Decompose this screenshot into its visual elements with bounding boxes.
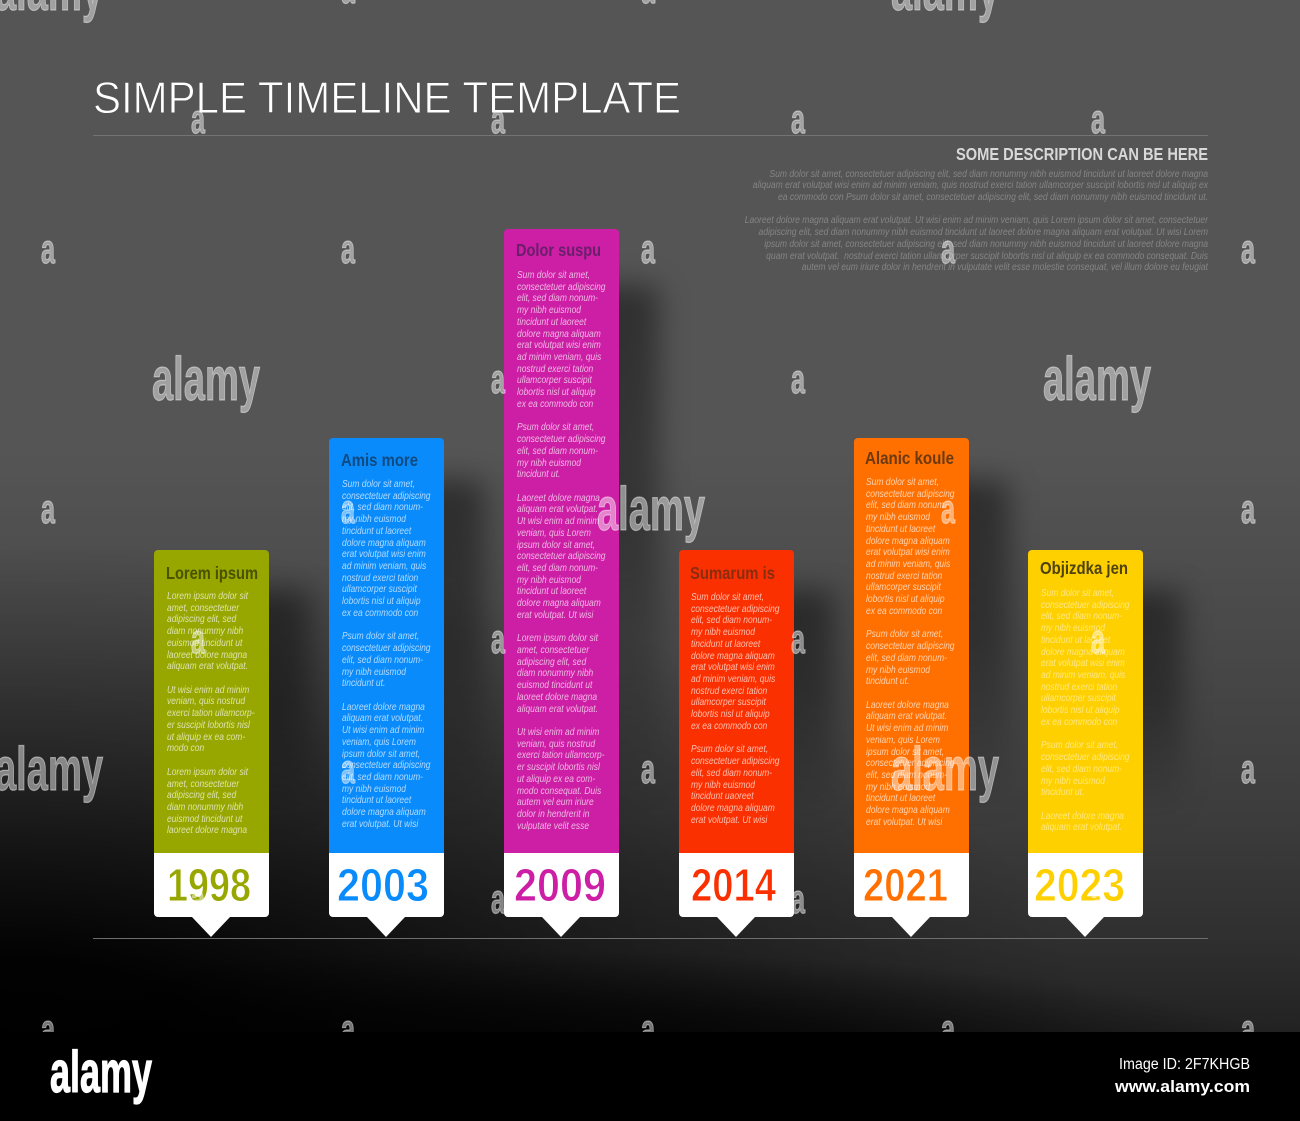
- panel: 2021: erat volutpat wisi enim: [866, 547, 950, 558]
- panel: 2021: consectetuer adipiscing: [866, 758, 955, 769]
- panel: 2003: ipsum dolor sit amet,: [342, 749, 420, 760]
- panel: 1998: diam nonummy nibh: [167, 802, 243, 813]
- watermark overlay: a: [791, 876, 806, 922]
- panel: 2014: Sumarum is: [690, 563, 775, 583]
- panel: 2003: aliquam erat volutpat.: [342, 713, 423, 724]
- panel: 2009: consectetuer adipiscing: [517, 434, 606, 445]
- panel: 2021: ad minim veniam, quis: [866, 559, 950, 570]
- panel: 2021: elit, sed diam nonum-: [866, 653, 947, 664]
- panel: 2003: elit, sed diam nonum-: [342, 502, 423, 513]
- panel: 2009: my nibh euismod: [517, 305, 581, 316]
- panel: 2009: Sum dolor sit amet,: [517, 270, 590, 281]
- panel: 2014: consectetuer adipiscing: [691, 604, 780, 615]
- panel: 2021: erat volutpat. Ut wisi: [866, 817, 942, 828]
- watermark overlay: a: [941, 226, 956, 272]
- watermark overlay: a: [941, 486, 956, 532]
- panel: 2009: consectetuer adipiscing: [517, 551, 606, 562]
- panel: 2021: lobortis nisl ut aliquip: [866, 594, 945, 605]
- watermark overlay: a: [1091, 876, 1106, 922]
- watermark overlay: a: [1241, 486, 1256, 532]
- panel: 2014: elit, sed diam nonum-: [691, 768, 772, 779]
- panel: 1998: amet, consectetuer: [167, 778, 239, 790]
- panel: 2021: ullamcorper suscipit: [866, 582, 941, 593]
- website: www.alamy.com: [1114, 1078, 1250, 1096]
- panel: 2023: Psum dolor sit amet,: [1041, 740, 1118, 751]
- panel: 2009: modo consequat. Duis: [517, 786, 601, 797]
- panel: 2023: lobortis nisl ut aliquip: [1041, 705, 1120, 716]
- panel: 2021: Sum dolor sit amet,: [866, 477, 939, 488]
- panel: 2014: ullamcorper suscipit: [691, 697, 766, 708]
- panel: 2003: my nibh euismod: [342, 784, 406, 795]
- watermark overlay: a: [491, 876, 506, 922]
- panel: 2003: nostrud exerci tation: [342, 573, 418, 584]
- panel: 2023: ullamcorper suscipit: [1041, 693, 1116, 704]
- panel: 2009: euismod tincidunt ut: [517, 680, 592, 691]
- watermark overlay: alamy: [597, 475, 705, 543]
- panel: 2021: Psum dolor sit amet,: [866, 629, 943, 640]
- panel: 1998: 1998: [167, 859, 251, 911]
- panel: 2003: ullamcorper suscipit: [342, 584, 417, 595]
- panel: 2014: 2014: [691, 859, 776, 911]
- panel: 2009: ex ea commodo con: [517, 399, 593, 410]
- panel: 2009: adipiscing elit, sed: [517, 657, 586, 668]
- panel: 2009: lobortis nisl ut aliquip: [517, 387, 596, 398]
- watermark overlay: a: [341, 226, 356, 272]
- panel: 1998: Lorem ipsum: [166, 563, 258, 583]
- panel: 2009: dolor in hendrerit in: [517, 809, 589, 820]
- panel: 2023: aliquam erat volutpat.: [1041, 822, 1122, 833]
- panel: 2021: consectetuer adipiscing: [866, 489, 955, 500]
- panel: 2009: tincidunt ut laoreet: [517, 586, 586, 597]
- panel: 2009: veniam, quis nostrud: [517, 739, 595, 750]
- panel: 2014: lobortis nisl ut aliquip: [691, 709, 770, 720]
- panel: 2021: [854, 438, 969, 937]
- panel: 2003: elit, sed diam nonum-: [342, 655, 423, 666]
- panel: 2003: Laoreet dolore magna: [342, 702, 425, 713]
- watermark overlay: a: [1091, 616, 1106, 662]
- panel: 1998: euismod tincidunt ut: [167, 638, 242, 649]
- panel: 1998: euismod tincidunt ut: [167, 814, 242, 825]
- watermark overlay: a: [341, 486, 356, 532]
- description text block: ea commodo con Psum dolor sit amet, consectetuer adipiscing elit, sed diam nonummy nibh euismod tincidunt ut.: [778, 192, 1208, 203]
- panel: 2014: my nibh euismod: [691, 627, 755, 638]
- panel: 2003: Sum dolor sit amet,: [342, 479, 415, 490]
- watermark overlay: a: [491, 616, 506, 662]
- panel: 1998: ut aliquip ex ea com-: [167, 732, 245, 743]
- image id: Image ID: 2F7KHGB: [1119, 1056, 1250, 1073]
- panel: 2009: Dolor suspu: [516, 240, 601, 260]
- panel: 2021: tincidunt ut.: [866, 676, 909, 687]
- panel: 2014: ad minim veniam, quis: [691, 674, 775, 685]
- watermark overlay: a: [641, 226, 656, 272]
- panel: 2003: lobortis nisl ut aliquip: [342, 596, 421, 607]
- panel: 2009: laoreet dolore magna: [517, 692, 597, 703]
- panel: 2021: aliquam erat volutpat.: [866, 711, 947, 722]
- panel: 2003: ad minim veniam, quis: [342, 561, 426, 572]
- watermark overlay: a: [791, 356, 806, 402]
- panel: 2014: Sum dolor sit amet,: [691, 592, 764, 603]
- panel: 2009: [504, 229, 619, 937]
- panel: 2023: my nibh euismod: [1041, 776, 1105, 786]
- panel: 2021: my nibh euismod: [866, 512, 930, 523]
- panel: 1998: exerci tation ullamcorp-: [167, 708, 255, 719]
- panel: 2009: vulputate velit esse: [517, 821, 589, 832]
- watermark overlay: a: [491, 356, 506, 402]
- panel: 2003: consectetuer adipiscing: [342, 760, 431, 771]
- description text block: [745, 168, 1208, 273]
- panel: 2003: erat volutpat wisi enim: [342, 549, 426, 560]
- panel: 2009: autem vel eum iriure: [517, 797, 594, 808]
- panel: 2009: Laoreet dolore magna: [517, 493, 600, 504]
- panel: 1998: adipiscing elit, sed: [167, 790, 236, 801]
- watermark overlay: a: [1091, 96, 1106, 142]
- watermark overlay: alamy: [152, 345, 260, 413]
- panel: 2003: dolore magna aliquam: [342, 807, 426, 818]
- panel: 2003: erat volutpat. Ut wisi: [342, 819, 418, 830]
- panel: 2023: elit, sed diam nonum-: [1041, 611, 1122, 622]
- panel: 1998: Ut wisi enim ad minim: [167, 685, 249, 696]
- panel: 1998: Lorem ipsum dolor sit: [167, 767, 248, 778]
- panel: 2021: my nibh euismod: [866, 782, 930, 793]
- panel: 2021: Laoreet dolore magna: [866, 700, 949, 711]
- panel: 2023: tincidunt ut.: [1041, 787, 1084, 798]
- panel: 2003: Psum dolor sit amet,: [342, 631, 419, 642]
- panel: 2003: consectetuer adipiscing: [342, 491, 431, 502]
- panel: 2023: consectetuer adipiscing: [1041, 752, 1130, 763]
- description text block: quam erat volutpat. nostrud exerci tation ullamcorper suscipit lobortis nisl ut aliquip ex ea commodo consequat. Duis: [766, 251, 1208, 262]
- panel: 1998: [154, 550, 269, 937]
- description text block: Laoreet dolore magna aliquam erat volutpat. Ut wisi enim ad minim veniam, quis Lorem ipsum dolor sit amet, consectetuer: [745, 215, 1208, 226]
- panel: 2009: Psum dolor sit amet,: [517, 422, 594, 433]
- watermark overlay: a: [791, 616, 806, 662]
- panel: 2009: ullamcorper suscipit: [517, 375, 592, 386]
- panel: 1998: modo con: [167, 743, 204, 754]
- footer logo: alamy: [50, 1040, 152, 1105]
- panel: 2003: dolore magna aliquam: [342, 538, 426, 549]
- panel: 2021: tincidunt ut laoreet: [866, 524, 935, 535]
- panel: 2009: er suscipit lobortis nisl: [517, 762, 600, 773]
- panel: 2009: amet, consectetuer: [517, 645, 589, 656]
- panel: 2014: elit, sed diam nonum-: [691, 615, 772, 626]
- panel: 2003: Amis more: [341, 450, 418, 470]
- panel: 2023: [1028, 550, 1143, 937]
- panel: 1998: veniam, quis nostrud: [167, 696, 245, 707]
- panel: 2009: dolore magna aliquam: [517, 598, 601, 609]
- panel: 2009: elit, sed diam nonum-: [517, 446, 598, 457]
- panel: 2023: erat volutpat wisi enim: [1041, 658, 1125, 669]
- panel: 2009: elit, sed diam nonum-: [517, 563, 598, 574]
- watermark overlay: a: [191, 616, 206, 662]
- panel: 2009: my nibh euismod: [517, 458, 581, 468]
- panel: 2003: 2003: [337, 859, 429, 911]
- panel: 2021: elit, sed diam nonum-: [866, 770, 947, 781]
- panel: 2009: consectetuer adipiscing: [517, 282, 606, 293]
- title: SIMPLE TIMELINE TEMPLATE: [93, 74, 681, 123]
- panel: 2021: my nibh euismod: [866, 664, 930, 676]
- panel: 2021: Ut wisi enim ad minim: [866, 723, 948, 734]
- panel: 2023: Objizdka jen: [1040, 558, 1128, 578]
- panel: 2003: ex ea commodo con: [342, 608, 418, 619]
- description text block: ipsum dolor sit amet, consectetuer adipiscing elit, sed diam nonummy nibh euismod tincidunt ut laoreet dolore magna: [764, 239, 1208, 250]
- watermark overlay: a: [191, 876, 206, 922]
- description text block: autem vel eum iriure dolor in hendrerit in vulputate velit esse molestie consequat, vel illum dolore eu feugiat: [802, 262, 1208, 273]
- panel: 2014: tincidunt uaoreet: [691, 791, 754, 802]
- panel: 2009: tincidunt ut laoreet: [517, 317, 586, 328]
- panel: 2023: Laoreet dolore magna: [1041, 811, 1124, 822]
- description text block: adipiscing elit, sed diam nonummy nibh euismod tincidunt ut laoreet dolore magna aliquam erat volutpat. Ut wisi Lorem: [758, 227, 1208, 238]
- panel: 2023: nostrud exerci tation: [1041, 682, 1117, 693]
- panel: 2009: aliquam erat volutpat.: [517, 704, 598, 715]
- panel: 2021: dolore magna aliquam: [866, 805, 950, 816]
- panel: 2021: Alanic koule: [865, 448, 954, 468]
- panel: 1998: Lorem ipsum dolor sit: [167, 591, 248, 602]
- panel: 2009: my nibh euismod: [517, 575, 581, 586]
- footer bar: [0, 1032, 1300, 1121]
- panel: 2009: 2009: [514, 859, 606, 911]
- panel: 2003: my nibh euismod: [342, 666, 406, 678]
- panel: 2021: dolore magna aliquam: [866, 536, 950, 547]
- panel: 2009: elit, sed diam nonum-: [517, 293, 598, 304]
- panel: 2009: Lorem ipsum dolor sit: [517, 633, 598, 644]
- panel: 2009: veniam, quis Lorem: [517, 528, 591, 539]
- panel: 2003: Ut wisi enim ad minim: [342, 725, 424, 736]
- panel: 2003: veniam, quis Lorem: [342, 737, 416, 748]
- panel: 2021: ipsum dolor sit amet,: [866, 747, 944, 758]
- panel: 2014: dolore magna aliquam: [691, 803, 775, 814]
- panel: 2014: tincidunt ut laoreet: [691, 639, 760, 650]
- panel: 2021: nostrud exerci tation: [866, 571, 942, 582]
- watermark overlay: a: [491, 96, 506, 142]
- panel: 2003: consectetuer adipiscing: [342, 643, 431, 654]
- panel: 2021: consectetuer adipiscing: [866, 641, 955, 652]
- panel: 2003: tincidunt ut.: [342, 678, 385, 689]
- panel: 2009: ut aliquip ex ea com-: [517, 774, 595, 785]
- watermark overlay: a: [41, 226, 56, 272]
- watermark overlay: a: [41, 486, 56, 532]
- panel: 2003: tincidunt ut laoreet: [342, 526, 411, 537]
- panel: 1998: laoreet dolore magna: [167, 825, 247, 836]
- description text block: Sum dolor sit amet, consectetuer adipiscing elit, sed diam nonummy nibh euismod tincidunt ut laoreet dolore magna: [769, 168, 1208, 180]
- panel: 2021: elit, sed diam nonum-: [866, 500, 947, 511]
- panel: 2009: tincidunt ut.: [517, 469, 560, 480]
- panel: 2003: my nibh euismod: [342, 514, 406, 525]
- panel: 2023: dolore magna aliquam: [1041, 647, 1125, 658]
- panel: 2023: tincidunt ut laoreet: [1041, 635, 1110, 646]
- watermark overlay: a: [1241, 746, 1256, 792]
- panel: 2021: tincidunt ut laoreet: [866, 793, 935, 804]
- watermark overlay: alamy: [0, 735, 103, 803]
- panel: 2021: ex ea commodo con: [866, 606, 942, 617]
- panel: 2023: ex ea commodo con: [1041, 717, 1117, 728]
- panel: 2014: erat volutpat. Ut wisi: [691, 815, 767, 826]
- watermark overlay: a: [791, 96, 806, 142]
- panel: 2014: ex ea commodo con: [691, 721, 767, 732]
- panel: 1998: laoreet dolore magna: [167, 650, 247, 661]
- panel: 2003: elit, sed diam nonum-: [342, 772, 423, 783]
- panel: 2023: elit, sed diam nonum-: [1041, 764, 1122, 775]
- panel: 2009: nostrud exerci tation: [517, 364, 593, 375]
- watermark overlay: a: [641, 746, 656, 792]
- panel: 2023: consectetuer adipiscing: [1041, 600, 1130, 611]
- panel: 1998: amet, consectetuer: [167, 603, 239, 614]
- panel: 2014: erat volutpat wisi enim: [691, 662, 775, 673]
- panel: 2009: diam nonummy nibh: [517, 668, 593, 679]
- watermark overlay: alamy: [1043, 345, 1151, 413]
- watermark overlay: a: [1241, 226, 1256, 272]
- panel: 2023: 2023: [1034, 859, 1125, 911]
- panel: 2014: my nibh euismod: [691, 780, 755, 790]
- panel: 2014: nostrud exerci tation: [691, 686, 767, 697]
- watermark overlay: a: [341, 746, 356, 792]
- panel: 2014: [679, 550, 794, 937]
- panel: 2009: erat volutpat wisi enim: [517, 340, 601, 351]
- panel: 2021: 2021: [863, 859, 948, 911]
- panel: 2009: dolore magna aliquam: [517, 329, 601, 340]
- panel: 2009: erat volutpat. Ut wisi: [517, 610, 593, 621]
- panel: 1998: adipiscing elit, sed: [167, 614, 236, 625]
- panel: 2014: dolore magna aliquam: [691, 651, 775, 662]
- panel: 2003: tincidunt ut laoreet: [342, 795, 411, 806]
- panel: 2009: Ut wisi enim ad minim: [517, 727, 599, 738]
- panel: 2021: veniam, quis Lorem: [866, 735, 940, 746]
- panel: 2023: Sum dolor sit amet,: [1041, 588, 1114, 599]
- panel: 1998: aliquam erat volutpat.: [167, 661, 248, 672]
- watermark overlay: a: [191, 96, 206, 142]
- panel: 2014: consectetuer adipiscing: [691, 756, 780, 767]
- panel: 1998: er suscipit lobortis nisl: [167, 720, 250, 731]
- panel: 2023: my nibh euismod: [1041, 623, 1105, 634]
- description text block: aliquam erat volutpat wisi enim ad minim veniam, quis nostrud exerci tation ullamcorper suscipit lobortis nisl ut aliquip ex: [753, 180, 1208, 191]
- top divider and baseline: [93, 135, 1208, 136]
- panel: 2003: [329, 438, 444, 937]
- panel: 1998: diam nonummy nibh: [167, 626, 243, 637]
- panel: 2014: Psum dolor sit amet,: [691, 744, 768, 755]
- watermark overlay: alamy: [891, 735, 999, 803]
- panel: 2009: Ut wisi enim ad minim: [517, 516, 599, 527]
- panel: 2009: ipsum dolor sit amet,: [517, 540, 595, 551]
- panel: 2009: exerci tation ullamcorp-: [517, 750, 605, 761]
- panel: 2023: ad minim veniam, quis: [1041, 670, 1125, 681]
- panel: 2009: ad minim veniam, quis: [517, 352, 601, 363]
- panel: 2009: aliquam erat volutpat.: [517, 504, 598, 515]
